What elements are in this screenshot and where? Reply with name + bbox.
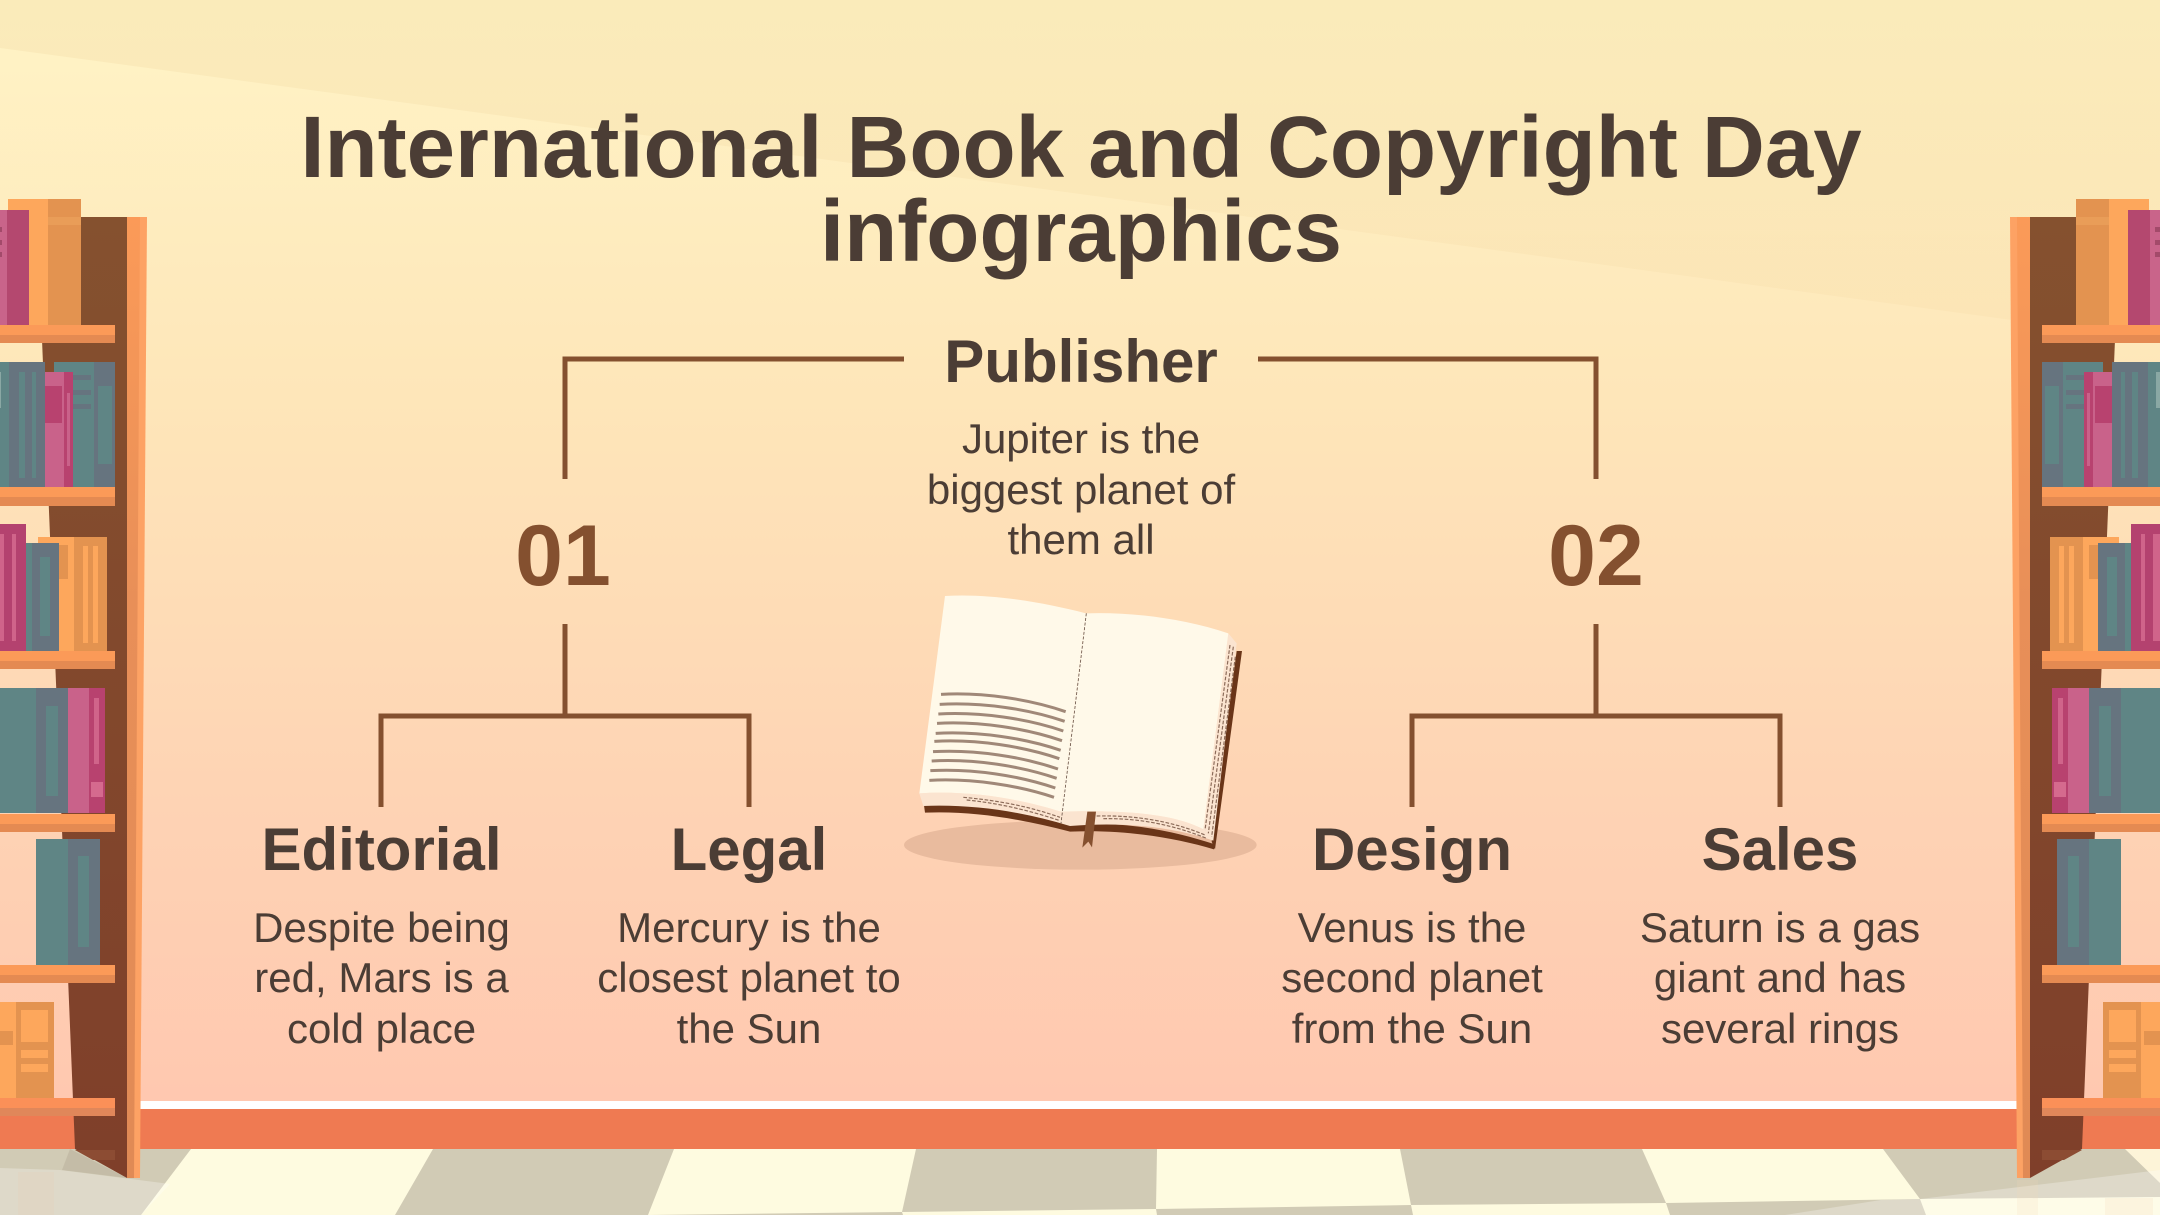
bookcase front post — [127, 217, 147, 1178]
bookcase left — [0, 199, 147, 1178]
books row 3 — [0, 524, 107, 651]
block: legal — [597, 816, 901, 1052]
wall shadow band — [0, 0, 2160, 340]
block: publisher: them all — [1007, 516, 1155, 563]
books row 6 — [0, 1002, 54, 1098]
connector: 02 to design and sales — [1412, 624, 1780, 807]
left page — [919, 596, 1086, 812]
block: design — [1281, 816, 1543, 1052]
block: design: second planet — [1281, 954, 1543, 1001]
block: design: Design — [1312, 816, 1512, 883]
title: International Book and Copyright Day — [300, 99, 1862, 196]
page edge dashes — [963, 645, 1235, 838]
bookcase side panel — [37, 217, 127, 1178]
spine — [1061, 613, 1086, 823]
text lines — [929, 694, 1066, 797]
block: editorial: Editorial — [261, 816, 502, 883]
block: editorial: Despite being — [253, 904, 510, 951]
shelf 1 — [0, 325, 115, 343]
block: sales: several rings — [1661, 1005, 1899, 1052]
shelf 4 — [0, 814, 115, 832]
shelf 6 — [0, 1098, 115, 1116]
block: sales: Saturn is a gas — [1640, 904, 1920, 951]
title — [300, 99, 1862, 280]
connector: 01 to editorial and legal — [381, 624, 749, 807]
block: publisher — [927, 328, 1235, 563]
connector: publisher to 01 — [565, 359, 904, 479]
block: publisher: Publisher — [944, 328, 1218, 395]
bookmark — [1082, 812, 1096, 848]
books row 1 — [0, 199, 81, 325]
connector: publisher to 02 — [1258, 359, 1596, 479]
number 02: 02 — [1548, 508, 1644, 604]
white skirting line — [0, 1101, 2160, 1109]
orange skirting board — [0, 1109, 2160, 1149]
book shadow — [904, 820, 1257, 870]
page stack — [919, 633, 1237, 841]
icon: open book — [904, 596, 1257, 870]
books row 4 — [0, 688, 105, 813]
right page — [1061, 613, 1228, 829]
block: sales: giant and has — [1654, 954, 1906, 1001]
books row 2 — [0, 362, 115, 487]
block: editorial: red, Mars is a — [254, 954, 509, 1001]
block: editorial — [253, 816, 510, 1052]
block: design: Venus is the — [1298, 904, 1526, 951]
block: sales: Sales — [1702, 816, 1858, 883]
books row 5 — [36, 839, 100, 965]
checkered floor — [0, 1149, 2160, 1215]
block: legal: the Sun — [677, 1005, 821, 1052]
title: infographics — [820, 183, 1342, 280]
floor reflection left — [0, 1149, 170, 1215]
number 01: 01 — [515, 508, 611, 604]
block: publisher: Jupiter is the — [962, 415, 1200, 462]
floor reflection right — [1785, 1170, 2160, 1215]
block: design: from the Sun — [1292, 1005, 1532, 1052]
block: publisher: biggest planet of — [927, 466, 1235, 513]
bookcase right — [2010, 199, 2160, 1178]
shelf 3 — [0, 651, 115, 669]
back cover — [924, 651, 1242, 849]
block: legal: Mercury is the — [617, 904, 881, 951]
block: legal: closest planet to — [597, 954, 901, 1001]
shelf 2 — [0, 487, 115, 506]
shelf 5 — [0, 965, 115, 983]
block: sales — [1640, 816, 1920, 1052]
block: editorial: cold place — [287, 1005, 476, 1052]
block: legal: Legal — [671, 816, 827, 883]
